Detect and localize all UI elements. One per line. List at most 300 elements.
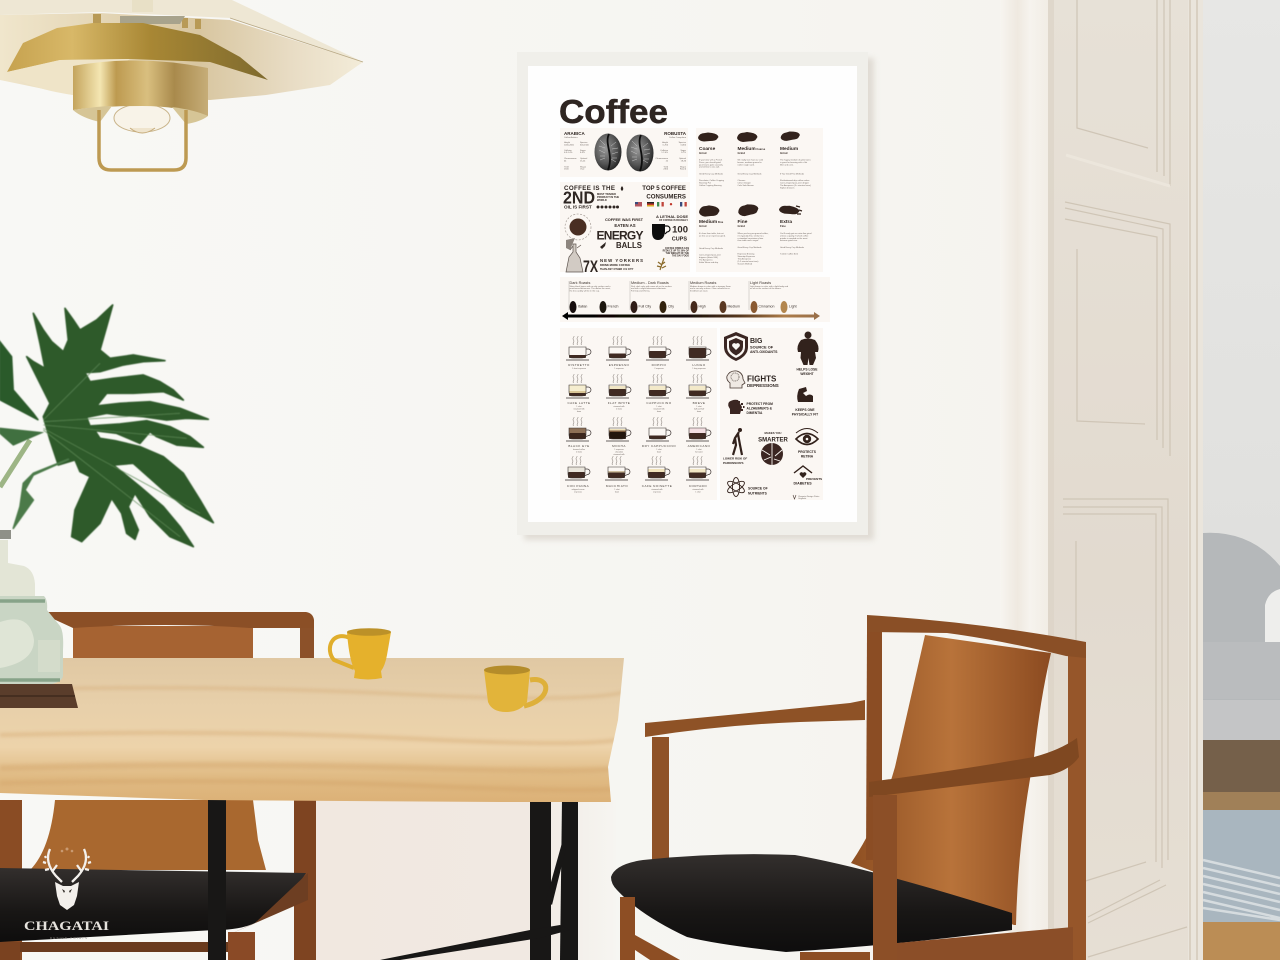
tall glass vase (0, 540, 35, 600)
consumer flags (635, 202, 687, 206)
drink: cafe noisette: espresso (653, 490, 661, 493)
grind: medium: Grind (780, 151, 788, 155)
grind: medium: Siphon brewers (780, 187, 794, 190)
benefit: diabetes: DIABETES (794, 482, 812, 486)
roast: light: Light (789, 304, 797, 308)
fact: energy balls: BALLS (616, 241, 642, 250)
drink: cappuccino (646, 374, 672, 413)
panel: arabica and robusta: Shape (680, 166, 687, 168)
next room through doorway (1198, 0, 1280, 960)
lamp stem (132, 0, 153, 12)
panel: arabica and robusta: Species (679, 142, 686, 144)
armchair front post (873, 795, 897, 960)
drink: doppio: DOPPIO (652, 363, 667, 367)
grind: medium fine: The Aeropress (699, 258, 713, 261)
grind: extra fine: Fine (780, 224, 786, 228)
drink: mocha (606, 417, 631, 456)
fact: top five consumers: TOP 5 COFFEE (642, 185, 686, 192)
armchair (611, 615, 1086, 960)
drink: americano: 1 shot (696, 448, 702, 451)
grind: extra fine: You'll rarely get an extra-fine grind (780, 232, 812, 235)
panel: arabica and robusta: 1.7-4% (661, 152, 668, 154)
roast: light: Light Roasts (750, 281, 771, 285)
roast: medium: and a non-oily surface. Often referred to as (690, 287, 730, 290)
fact: lethal dose: A LETHAL DOSE (656, 214, 688, 219)
brand name: CHAGATAI (24, 918, 109, 933)
benefit: physically fit (792, 387, 818, 416)
grind: coarse: and similar to sea salt. (699, 166, 720, 169)
roast: light (750, 281, 797, 313)
panel: arabica and robusta: 22 (666, 160, 669, 162)
drink: ristretto: 1 short espresso (572, 367, 586, 370)
panel: arabica and robusta: 6-9% (580, 152, 585, 154)
grind: coarse (698, 132, 725, 187)
drink: espresso: 1 espresso (614, 367, 624, 370)
drink: macchiato (605, 456, 630, 493)
door panel middle (1065, 202, 1170, 456)
drink: mocha: MOCHA (612, 444, 626, 448)
roast: medium dark (630, 281, 674, 313)
panel: arabica and robusta: 0-700 (663, 144, 669, 146)
panel: arabica and robusta: 44 (564, 160, 567, 162)
drink: cafe noisette (642, 456, 672, 493)
drink: cafe noisette: steamed milk (651, 488, 663, 491)
drink: con panna: espresso (574, 490, 582, 493)
drink: cafe latte: foam (577, 411, 582, 413)
drink: lungo: 1 long espresso (692, 367, 706, 370)
benefit: diabetes: PREVENTS (806, 477, 822, 481)
fact: top five consumers (635, 185, 687, 206)
grind: medium coarse (737, 132, 766, 187)
drink: espresso: ESPRESSO (609, 363, 629, 367)
panel: arabica and robusta: Coffea Canephora (669, 136, 687, 139)
grind: extra fine: Turkish Coffee Ibrik (780, 253, 799, 256)
grind: fine: Stovetop Espresso (738, 255, 756, 258)
roast: medium: Medium brown in color with a stronger flavor (690, 285, 731, 288)
benefit: lose weight (797, 332, 819, 376)
panel: arabica and robusta: 0-800 (681, 144, 687, 146)
light bulb (114, 104, 170, 133)
panel: arabica and robusta: 600-1500 (580, 144, 590, 146)
panel: arabica and robusta: 3-7% (681, 152, 686, 154)
dining table (0, 658, 630, 960)
drink: cortado (686, 456, 711, 493)
armchair back right post (1068, 655, 1086, 960)
benefit: antioxidants (724, 332, 778, 361)
grind: extra fine: extreme grind size. (780, 239, 798, 242)
drink: dry cappuccino: foam (657, 451, 662, 453)
drink: mocha: steamed milk (613, 453, 625, 456)
roast: dark: French (608, 304, 618, 308)
panel: arabica and robusta: Chromosome (564, 157, 577, 160)
grind: medium fine: drippers (Hario V60) (699, 256, 718, 259)
panel: health benefits (720, 328, 823, 500)
fact: energy balls: COFFEE WAS FIRST (605, 217, 644, 222)
striped rug (1203, 810, 1280, 922)
plant stem (0, 440, 30, 487)
panel: arabica and robusta: Caffeine (564, 150, 573, 152)
panel: arabica and robusta: Oval (580, 169, 585, 171)
drink: mocha: chocolate (615, 450, 623, 453)
fact: coffee fibres: THE WEIGHT OF THE (666, 253, 689, 255)
drink: cappuccino: 1 shot (656, 405, 662, 408)
grind: medium: The Aeropress (3+ minutes brew) (780, 184, 811, 187)
grind: medium (780, 130, 811, 190)
grind: fine: it is typically fine, similar to a (738, 234, 765, 237)
armchair back left post (866, 632, 882, 860)
panel: arabica and robusta: Shape (580, 166, 587, 168)
drink: macchiato: foam (615, 491, 620, 493)
icon: black cup (652, 224, 670, 240)
grind: coarse: your beans quite coarsely (699, 163, 724, 166)
panel: arabica and robusta: Optimal (679, 157, 687, 160)
grind: medium: If You Grind Fine Methods (780, 173, 804, 176)
benefit: smarter: MAKES YOU (765, 431, 781, 435)
roast: medium: the American roast. (690, 289, 708, 292)
grind: extra fine: grinder is needed as the most (780, 237, 808, 240)
grind: medium: Cone-shaped pour-over dripper (780, 182, 809, 185)
drink: black eye: BLACK EYE (568, 444, 590, 448)
roast: light: no oil on the surface of the beans. (750, 287, 782, 290)
drink: dry cappuccino: DRY CAPPUCCINO (642, 444, 676, 448)
grind: medium coarse: Grind (738, 151, 745, 155)
small brand mark (793, 495, 819, 500)
fact: second most traded: MOST TRADED (597, 192, 616, 196)
drink: lungo (686, 336, 711, 370)
drink: cafe latte (566, 374, 591, 413)
drink: black eye (566, 417, 591, 453)
roast: medium (690, 281, 740, 313)
armchair back panel (851, 635, 1051, 925)
roast: medium dark: and with a slight bittersweet aftertaste. (631, 287, 667, 290)
fact: second most traded: 2ND (563, 188, 595, 208)
benefit: physically fit: PHYSICALLY FIT (792, 412, 818, 416)
lamp hanger loop (99, 110, 186, 170)
fact: energy balls: ENERGY (596, 228, 644, 242)
drink: doppio (646, 336, 671, 370)
roast scale arrow (562, 312, 820, 320)
roast: medium: Medium (728, 304, 740, 308)
panel: arabica and robusta: 2300 (663, 169, 669, 171)
yellow cup left (330, 628, 391, 680)
roast: medium dark: Medium - Dark Roasts (631, 281, 669, 285)
panel: arabica and robusta (560, 128, 688, 177)
panel: arabica and robusta: Species (580, 142, 587, 144)
rear dining chair (0, 612, 316, 960)
grind: medium fine: Grind Every Cup Methods (699, 247, 723, 250)
fact: new yorkers: NEW YORKERS (600, 258, 643, 263)
chair posts (0, 800, 22, 960)
drink: ristretto: RISTRETTO (568, 363, 590, 367)
grind: medium coarse: brewer, medium-ground is (738, 161, 762, 164)
benefit: antioxidants: ANTI-OXIDANTS (750, 350, 778, 354)
grind: fine (737, 203, 769, 266)
large leaf (0, 305, 213, 547)
chair top rail (47, 612, 314, 628)
drink: flat white: steamed milk (613, 405, 625, 408)
glass vase on table (0, 596, 78, 708)
plant leaves (0, 305, 213, 600)
arabica bean (594, 134, 622, 170)
yellow cup right (484, 666, 546, 712)
panel: arabica and robusta: Height (662, 141, 668, 144)
benefit: alzheimer's (728, 400, 773, 415)
armchair left arm (645, 700, 865, 737)
armchair right arm (869, 738, 1079, 797)
benefit: retina: PROTECTS (798, 450, 817, 454)
small brand mark: Originals (798, 497, 806, 500)
roast: dark: Shiny black beans with an oily surface and a (570, 285, 611, 288)
brand subtitle: DESIGN PRINTS (50, 936, 87, 940)
drink: lungo: LUNGO (692, 363, 706, 367)
fact: energy balls (596, 217, 644, 250)
drink: americano: hot water (695, 450, 703, 453)
coffee poster (559, 93, 830, 500)
roast: dark: pronounced bitterness. The darker the roast, (570, 287, 611, 290)
grind: medium fine (699, 205, 726, 264)
panel: arabica and robusta: 1000-2000 (564, 144, 575, 146)
benefit: parkinson's: PARKINSON'S (723, 461, 744, 465)
drink: ristretto (566, 336, 591, 370)
armchair seat (611, 854, 1012, 952)
roast: medium: Medium Roasts (690, 281, 716, 285)
benefit: fights depressions: DEPRESSIONS (747, 383, 779, 388)
grind: fine: (1-2 minute brew time) (738, 260, 759, 263)
grind: medium coarse: rather rough sand. (738, 163, 755, 166)
grind: coarse: Percolator, Coffee Cupping (699, 179, 725, 182)
drink: con panna: CON PANNA (567, 484, 590, 488)
fact: new yorkers: DRINK MORE COFFEE (600, 263, 630, 267)
fact: second most traded: WORLD (597, 198, 607, 202)
drink: mocha: 1 espresso (614, 448, 624, 451)
drink: con panna: whipped cream (572, 488, 585, 491)
drink: con panna (565, 456, 590, 493)
panel: arabica and robusta: Yield (564, 166, 569, 168)
grind: medium: Flat-bottomed drip coffee maker (780, 179, 810, 182)
roast: dark: Dark Roasts (570, 281, 590, 285)
grind: medium coarse: We really love how our cold (738, 158, 764, 162)
benefit: alzheimer's: ALZHEIMER'S & (746, 406, 773, 410)
drink: flat white: 2 shots (616, 407, 622, 410)
armchair top rail (867, 615, 1086, 658)
benefit: fights depressions: FIGHTS (747, 374, 777, 384)
fact: second most traded: PRODUCT IN THE (597, 195, 619, 199)
roast: dark: the less acidity will be in the cup. (570, 289, 600, 292)
benefit: alzheimer's: DIMENTIA (746, 411, 763, 415)
grind: coarse: Stovetop Pot (699, 182, 711, 185)
panel: arabica and robusta: Coffea Arabica (564, 136, 578, 139)
panel: arabica and robusta: ARABICA (564, 131, 585, 136)
fact: lethal dose: 100 (672, 224, 688, 236)
fact: coffee fibres: REDUCE UP TO 30% OF (663, 250, 690, 252)
grind: medium: is great for brewing with a flat (780, 161, 807, 164)
drink: macchiato: 1 shot (614, 488, 620, 491)
fact: lethal dose: OF COFFEE IS ROUGHLY (659, 219, 688, 222)
panel: roast scale (560, 277, 830, 322)
door panel upper (1066, 0, 1170, 186)
panel: arabica and robusta: Round (680, 169, 687, 171)
fact: second most traded: OIL IS FIRST (564, 204, 592, 210)
drink: cappuccino: CAPPUCCINO (646, 401, 672, 405)
grind: medium fine: Kalita Wave and drip (699, 261, 719, 264)
drink: flat white: FLAT WHITE (608, 401, 630, 405)
door and frame (1000, 0, 1203, 960)
grind: fine: Grind Every Cup Methods (738, 246, 761, 249)
drink: cafe latte: steamed milk (573, 407, 585, 410)
drink: americano (686, 417, 711, 453)
picture frame (517, 52, 874, 540)
panel: arabica and robusta: Yield (663, 166, 669, 168)
grind: coarse: Grind (699, 151, 707, 155)
wood grain (0, 688, 630, 790)
table legs (208, 800, 578, 960)
grind: extra fine: Extra (780, 219, 792, 225)
benefit: antioxidants: SOURCE OF (750, 344, 774, 350)
grind: medium: Medium (780, 146, 798, 152)
benefit: lose weight: HELPS LOSE (797, 368, 818, 372)
panel: arabica and robusta: 0.8-1.4% (564, 152, 572, 154)
drink: macchiato: MACCHIATO (606, 484, 628, 488)
panel: arabica and robusta: 18-36 (681, 160, 687, 162)
fact: coffee fibres (657, 247, 690, 270)
benefit: physically fit: KEEPS ONE (795, 408, 815, 412)
lower wall below table (316, 800, 616, 960)
drink: flat white (606, 374, 631, 410)
brass dome (7, 23, 268, 80)
illustration: statue of liberty (566, 244, 583, 272)
grind: extra fine: unless a quality, Turkish coffee (780, 234, 809, 237)
drink: dry cappuccino: 1 shot (656, 448, 662, 451)
grind: fine: Fine (738, 219, 748, 225)
fact: top five consumers: CONSUMERS (646, 194, 686, 200)
roast: medium: High (698, 304, 706, 308)
grind: coarse: Coarse (699, 146, 716, 152)
benefit: antioxidants: BIG (750, 338, 763, 345)
grind: extra fine: Grind Every Cup Methods (780, 246, 804, 249)
pendant lamp (0, 0, 363, 170)
grind: fine: The Aeropress (738, 258, 751, 261)
grind: fine: Espresso Brewing (738, 253, 755, 256)
grind: medium fine: Cone-shaped pour-over (699, 253, 721, 256)
grind: medium coarse: Clever Dripper (738, 182, 751, 185)
fact: energy balls: EATEN AS (614, 223, 636, 228)
grind: fine: Grind (738, 224, 745, 228)
drink: doppio: 2 espresso (654, 367, 664, 370)
drink: dry cappuccino (642, 417, 676, 453)
lamp shade top (0, 0, 363, 62)
grind: medium fine: Medium Fine (699, 219, 724, 225)
grind: fine: Scratch Method (738, 263, 753, 266)
drink: breve: BREVE (693, 401, 705, 405)
grind: extra fine (779, 204, 812, 256)
panel: coffee drinks (560, 328, 717, 500)
grind: medium coarse: Medium Coarse (738, 146, 766, 152)
fact: second most traded: COFFEE IS THE (564, 185, 615, 192)
panel: arabica and robusta: Caffeine (660, 150, 669, 152)
grind: coarse: Grind Every Cup Methods (699, 173, 723, 176)
table top (0, 658, 624, 802)
fact: lethal dose (652, 214, 688, 242)
grind: medium fine: Grind (699, 224, 707, 228)
grind: medium coarse: Cafe Solo Brewer (738, 184, 754, 187)
glass body (0, 596, 63, 686)
panel: arabica and robusta: Sugar (580, 149, 586, 152)
roast: dark (570, 281, 618, 313)
drink: cafe latte: CAFE LATTE (567, 401, 591, 405)
fact: new yorkers: 7X (583, 257, 598, 276)
drink: breve: foam (697, 411, 702, 413)
panel: arabica and robusta: Optimal (580, 157, 588, 160)
benefit: parkinson's (723, 428, 747, 465)
drink: americano: AMERICANO (688, 444, 711, 448)
roast: light: Light brown in color, with a light body and (750, 285, 789, 288)
grind: medium fine: as fine as an espresso grind. (699, 234, 726, 237)
drink: cappuccino: steamed milk (653, 407, 665, 410)
grind: coarse: Press, you should grind (699, 161, 722, 164)
benefit: alzheimer's: PROTECT FROM (746, 402, 773, 406)
panel: arabica and robusta: Chromosome (656, 157, 669, 160)
panel: arabica and robusta: 15-24 (580, 160, 586, 162)
armchair lower frame (897, 927, 1073, 960)
benefit: retina: RETINA (801, 454, 814, 458)
benefit: diabetes (794, 466, 822, 486)
drink: black eye: 2 shots (576, 450, 582, 453)
grind: medium: filter and cone. (780, 163, 794, 166)
wooden coaster (0, 684, 78, 708)
roast: light: Cinnamon (758, 304, 775, 308)
grind: medium fine: It's finer than table, but not (699, 232, 724, 235)
grey sofa (1203, 533, 1280, 740)
drink: cappuccino: foam (657, 411, 662, 413)
benefit: lose weight: WEIGHT (800, 372, 814, 376)
panel: coffee facts (560, 182, 690, 276)
chair lower back (30, 800, 266, 870)
drink: breve: 1 shot (696, 405, 702, 408)
drink: breve (686, 374, 711, 413)
benefit: nutrients (726, 478, 768, 496)
door panel lower (1063, 499, 1187, 957)
grind: medium: The happy medium of grind sizes (780, 158, 811, 162)
roast: medium dark: Full City (638, 304, 651, 308)
roast: medium dark: Full City and Vienna. (631, 289, 651, 292)
grind: coarse: Coffee Cupping Brewing (699, 184, 722, 187)
title: Coffee (559, 93, 668, 130)
panel: arabica and robusta: 1500 (564, 169, 569, 171)
grind: medium coarse: Grind Every Cup Methods (738, 173, 761, 176)
drink: espresso (606, 336, 631, 370)
roast: medium dark: City (668, 304, 674, 308)
benefit: parkinson's: LOWER RISK OF (723, 456, 747, 460)
fact: new yorkers (583, 257, 643, 276)
drink: cafe noisette: CAFE NOISETTE (642, 484, 672, 488)
panel: grind sizes (696, 128, 823, 272)
panel: arabica and robusta: ROBUSTA (664, 131, 687, 136)
brass cylinder (73, 60, 208, 116)
benefit: fights depressions (727, 371, 779, 388)
fact: coffee fibres: COFFEE FIBRES CAN (665, 247, 689, 250)
benefit: nutrients: SOURCE OF (748, 486, 768, 490)
roast: medium dark: Rich, dark color with some oil on the surface (631, 285, 673, 288)
grind: coarse: If you brew with a French (699, 158, 723, 162)
fact: coffee fibres: THE DAY FOOD (672, 254, 689, 258)
drink: cortado: 1 shot (695, 490, 701, 493)
roast: dark: Italian (578, 304, 587, 308)
panel: arabica and robusta: Sugar (680, 149, 686, 152)
logo: Chagatai deer (24, 848, 109, 940)
benefit: smarter: SMARTER (758, 438, 788, 444)
drink: cortado: steamed milk (692, 488, 704, 491)
drink: cafe latte: 1 shot (576, 405, 582, 408)
